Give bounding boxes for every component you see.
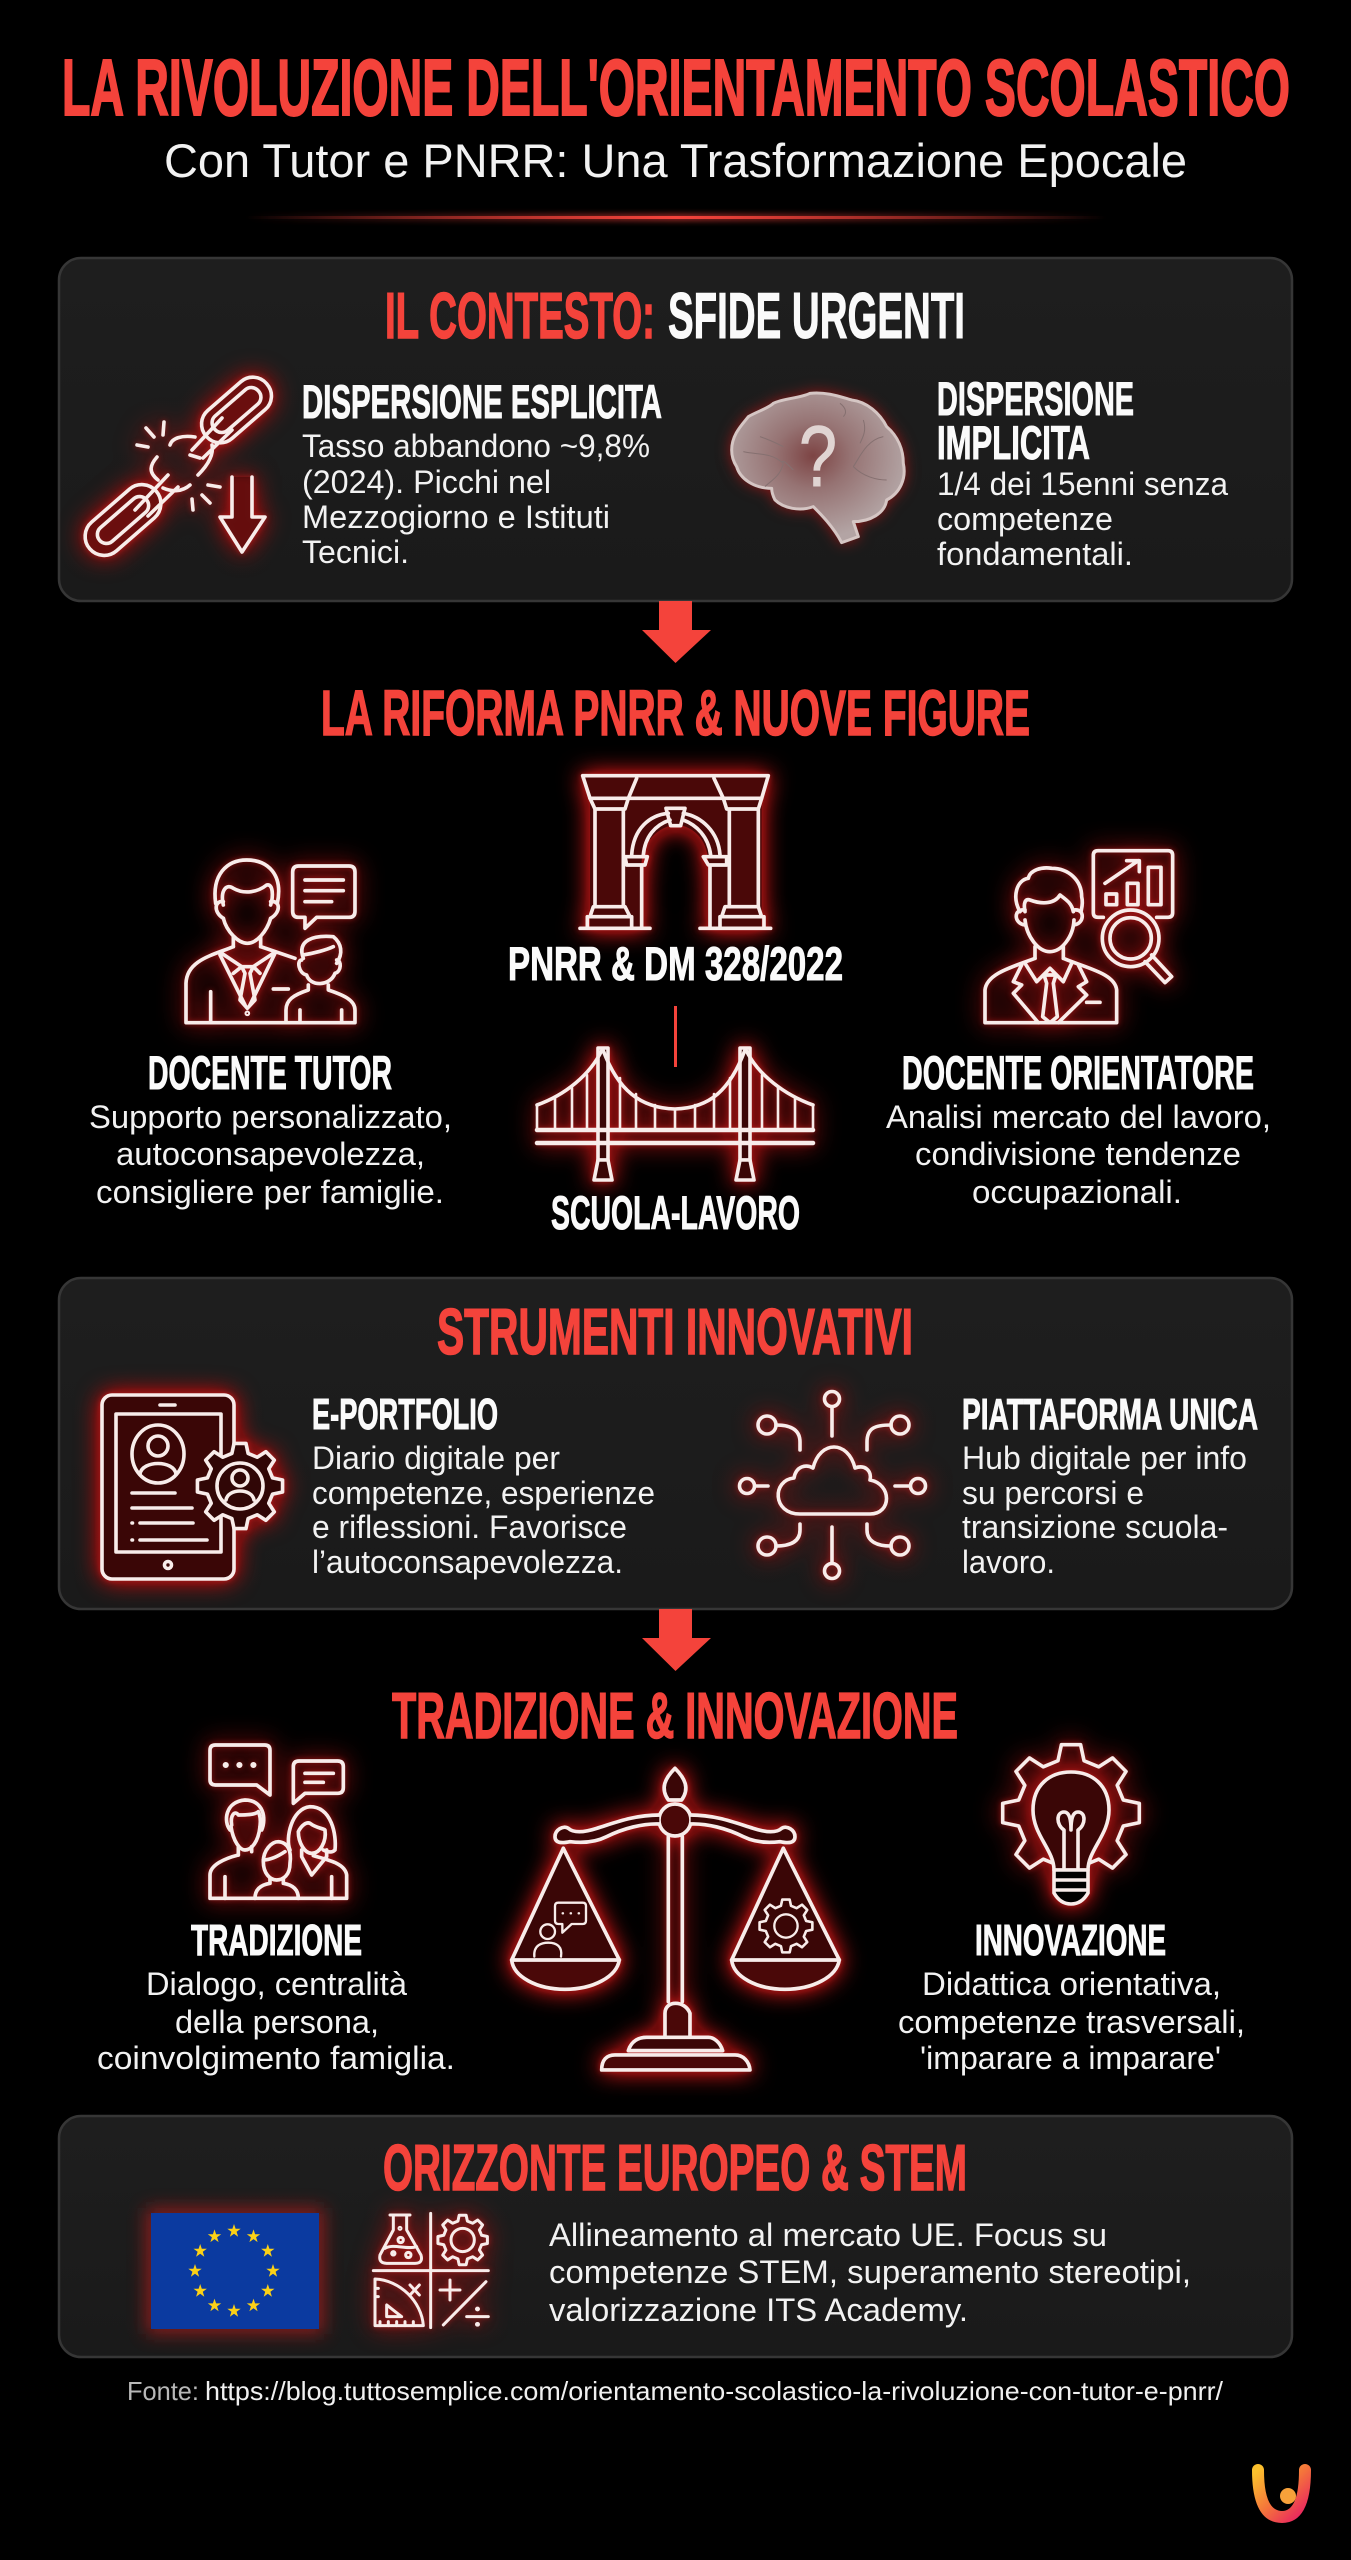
logo (1258, 2470, 1305, 2517)
heading: tradizione: TRADIZIONE (191, 1916, 362, 1965)
heading: dispersione implicita: IMPLICITA (937, 416, 1090, 469)
heading: orizzonte europeo: ORIZZONTE EUROPEO & STEM (383, 2131, 967, 2204)
icon: arch (580, 776, 771, 928)
subtitle: Con Tutor e PNRR: Una Trasformazione Epocale (164, 134, 1187, 187)
text: dispersione esplicita: Tasso abbandono ~9,8% (302, 428, 650, 464)
source line: https://blog.tuttosemplice.com/orientamento-scolastico-la-rivoluzione-con-tutor-e-pnrr/ (205, 2376, 1224, 2406)
icon: bridge (537, 1048, 813, 1180)
text: dispersione implicita (937, 466, 1228, 572)
text: e-portfolio: l’autoconsapevolezza. (312, 1544, 623, 1580)
text: piattaforma unica (962, 1440, 1247, 1580)
label: PNRR e DM: PNRR & DM 328/2022 (508, 937, 843, 990)
icon: lightbulb in gear (1003, 1745, 1139, 1904)
text: piattaforma unica: Hub digitale per info (962, 1440, 1247, 1476)
text: piattaforma unica: su percorsi e (962, 1475, 1144, 1511)
text: dispersione esplicita: Mezzogiorno e Istituti (302, 499, 610, 535)
text: e-portfolio: e riflessioni. Favorisce (312, 1509, 627, 1545)
heading: e-portfolio: E-PORTFOLIO (312, 1390, 498, 1439)
text: tradizione: della persona, (175, 2004, 379, 2040)
heading: dispersione implicita (937, 372, 1134, 469)
text: orizzonte europeo: competenze STEM, superamento stereotipi, (549, 2254, 1191, 2290)
text: e-portfolio: competenze, esperienze (312, 1475, 655, 1511)
icon: EU flag (146, 2208, 324, 2334)
text: innovazione: Didattica orientativa, (922, 1966, 1221, 2002)
heading: dispersione implicita: DISPERSIONE (937, 372, 1134, 425)
panel: orizzonte europeo (59, 2116, 1292, 2357)
arrow (642, 1609, 711, 1671)
text: dispersione esplicita (302, 428, 650, 570)
text: orizzonte europeo: Allineamento al mercato UE. Focus su (549, 2217, 1107, 2253)
heading: strumenti innovativi: STRUMENTI INNOVATIVI (437, 1295, 913, 1368)
heading: il contesto: SFIDE URGENTI (668, 279, 965, 352)
heading: docente tutor: DOCENTE TUTOR (148, 1046, 392, 1099)
text: dispersione implicita: fondamentali. (937, 536, 1133, 572)
text: docente orientatore (886, 1099, 1271, 1210)
icon: docente orientatore (985, 851, 1173, 1023)
text: dispersione esplicita: (2024). Picchi nel (302, 464, 551, 500)
heading: tradizione e innovazione: TRADIZIONE & INNOVAZIONE (392, 1679, 958, 1752)
text: docente tutor: Supporto personalizzato, (89, 1099, 452, 1135)
text: docente tutor: autoconsapevolezza, (116, 1136, 425, 1172)
source line: Fonte: (127, 2376, 199, 2406)
icon: brain with question mark: ? (799, 409, 837, 505)
text: dispersione implicita: competenze (937, 501, 1113, 537)
icon: docente tutor (186, 860, 355, 1023)
icon: STEM grid (373, 2213, 488, 2328)
text: innovazione: 'imparare a imparare' (920, 2040, 1221, 2076)
icon: balance scale (512, 1768, 839, 2070)
heading: dispersione esplicita: DISPERSIONE ESPLICITA (302, 375, 662, 428)
text: docente orientatore: occupazionali. (972, 1174, 1182, 1210)
text: piattaforma unica: transizione scuola- (962, 1509, 1228, 1545)
icon: family with speech bubbles (210, 1745, 347, 1898)
heading: il contesto: IL CONTESTO: (385, 279, 655, 352)
panel: strumenti innovativi (59, 1278, 1292, 1609)
text: tradizione: coinvolgimento famiglia. (97, 2040, 455, 2076)
text: e-portfolio (312, 1440, 655, 1580)
text: piattaforma unica: lavoro. (962, 1544, 1055, 1580)
text: docente tutor: consigliere per famiglie. (96, 1174, 444, 1210)
text: docente orientatore: condivisione tendenze (915, 1136, 1241, 1172)
text: dispersione implicita: 1/4 dei 15enni senza (937, 466, 1228, 502)
icon: brain with question mark (732, 393, 904, 543)
heading: innovazione: INNOVAZIONE (975, 1916, 1166, 1965)
label: scuola-lavoro: SCUOLA-LAVORO (551, 1186, 800, 1239)
text: tradizione: Dialogo, centralità (146, 1966, 407, 2002)
text: tradizione (97, 1966, 455, 2076)
text: orizzonte europeo: valorizzazione ITS Academy. (549, 2292, 968, 2328)
text: innovazione: competenze trasversali, (898, 2004, 1245, 2040)
text: orizzonte europeo (549, 2217, 1191, 2328)
panel: il contesto (59, 258, 1292, 601)
text: innovazione (898, 1966, 1245, 2076)
text: dispersione esplicita: Tecnici. (302, 534, 409, 570)
icon: cloud network (740, 1392, 926, 1578)
icon: broken chain and down arrow (77, 370, 279, 563)
text: e-portfolio: Diario digitale per (312, 1440, 560, 1476)
text: docente orientatore: Analisi mercato del lavoro, (886, 1099, 1271, 1135)
arrow (642, 601, 711, 663)
icon: tablet with gear (102, 1395, 283, 1579)
text: docente tutor (89, 1099, 452, 1210)
